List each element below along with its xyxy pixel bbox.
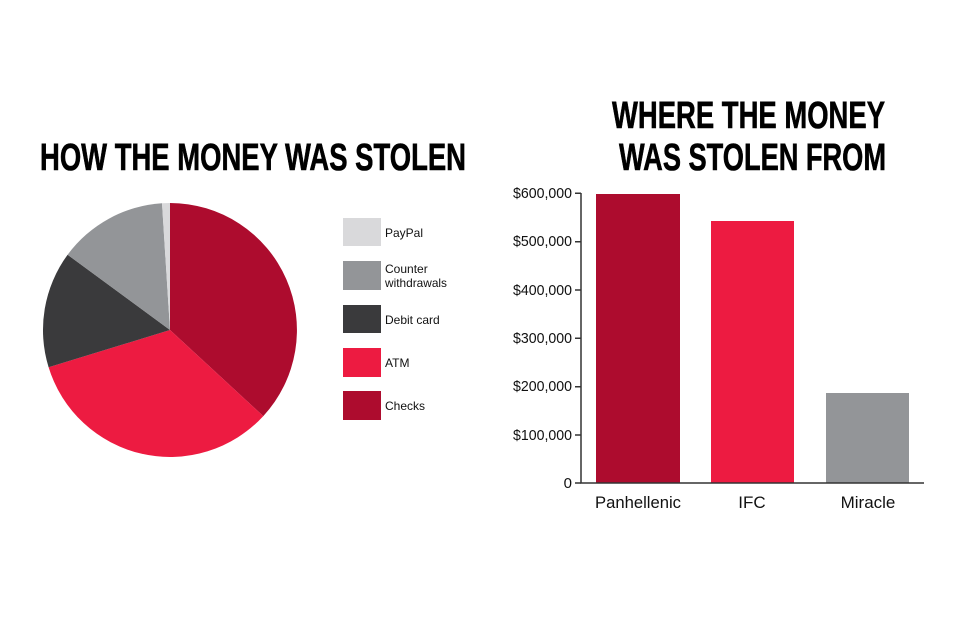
y axis labels bbox=[513, 185, 572, 492]
legend: PayPal bbox=[385, 226, 423, 240]
title: how the money was stolen: HOW THE MONEY WAS STOLEN bbox=[40, 137, 466, 179]
title: where the money was stolen from bbox=[612, 95, 886, 179]
legend: ATM bbox=[385, 356, 409, 370]
y axis labels: $200,000 bbox=[513, 378, 572, 395]
x axis labels: Miracle bbox=[841, 493, 895, 512]
legend: Counter bbox=[385, 262, 428, 276]
y axis labels: $500,000 bbox=[513, 233, 572, 250]
pie chart bbox=[43, 203, 297, 457]
x axis labels: Panhellenic bbox=[595, 493, 681, 512]
x axis labels: IFC bbox=[738, 493, 766, 512]
y axis labels: $300,000 bbox=[513, 330, 572, 347]
legend: Debit card bbox=[385, 313, 440, 327]
y axis labels: $400,000 bbox=[513, 282, 572, 299]
x axis labels bbox=[595, 493, 895, 512]
bar chart bbox=[513, 185, 924, 512]
legend: withdrawals bbox=[384, 276, 447, 290]
legend bbox=[343, 218, 447, 420]
y axis labels: $600,000 bbox=[513, 185, 572, 202]
y axis labels: 0 bbox=[564, 475, 572, 492]
legend: Checks bbox=[385, 399, 425, 413]
y axis labels: $100,000 bbox=[513, 427, 572, 444]
